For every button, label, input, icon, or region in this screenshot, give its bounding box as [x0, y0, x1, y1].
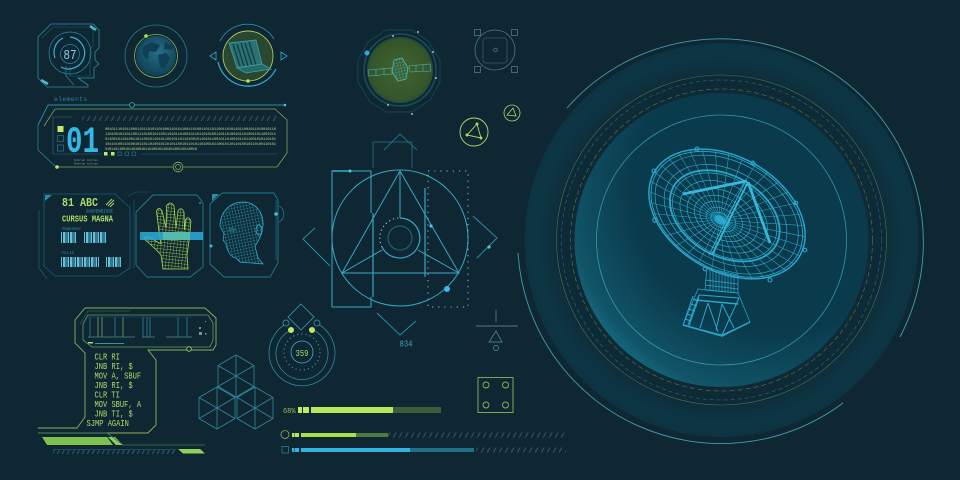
diagram value: 834 — [400, 338, 413, 350]
scan bar — [140, 232, 203, 240]
progress bar 68%: 68% — [283, 408, 296, 416]
binary text block: 00101110101100011011010110100011010110011010011011011001101011011001011010010110 — [105, 128, 277, 132]
sacred-geometry diagram — [303, 134, 497, 350]
assembly code: JNB RI, $ — [94, 381, 133, 391]
assembly code: SJMP AGAIN — [86, 419, 129, 429]
radar disk with satellite dish — [518, 39, 923, 444]
gauge value: 87 — [64, 48, 76, 64]
panel: code terminal — [38, 308, 216, 454]
panel: identity card: PRAESENT — [62, 228, 82, 232]
icon: triangle node large — [460, 118, 488, 146]
assembly code — [86, 352, 142, 429]
card heading: 81 ABC — [62, 196, 98, 210]
binary text block: 01100101101001101100101101011001011011010010110101100101101001011011001010110101 — [105, 138, 277, 142]
icon: four-dot square — [478, 378, 513, 412]
fine print — [74, 159, 98, 166]
progress bar 68% — [283, 407, 441, 416]
dish pedestal — [683, 268, 750, 336]
icon: wireframe satellite dish — [626, 123, 828, 336]
panel: binary readout 01 — [38, 102, 287, 172]
icon: wireframe head — [220, 202, 263, 264]
progress bar blue — [282, 446, 566, 453]
barcode: felis — [61, 257, 121, 267]
gauge 359 — [269, 304, 335, 386]
icon: satellite over planet — [358, 30, 440, 115]
assembly code: CLR RI — [94, 352, 120, 362]
binary text block: 10110100110100101101101001011010110010110101101001011001011011010010110100110101 — [105, 143, 277, 147]
panel: identity card: FELIS — [62, 252, 75, 256]
icon: triangle node small — [504, 105, 520, 121]
binary text block: 11010010110110011101001011001101011010010110110101001101101001011010011011001011 — [105, 133, 277, 137]
panel: hand scan — [136, 195, 203, 277]
terminal footer bars — [38, 433, 205, 454]
barcode: praesent — [61, 232, 106, 243]
panel: face scan — [210, 193, 284, 277]
dish rim bolts — [652, 147, 807, 282]
icon: balance symbol — [476, 310, 518, 350]
icon: wireframe hand — [144, 203, 191, 269]
binary text block: 0101101100101101001011010010110101100110110010 — [105, 148, 198, 152]
dish feed struts — [683, 181, 770, 255]
panel: identity card — [39, 192, 150, 279]
assembly code: MOV A, SBUF — [94, 372, 141, 382]
fine print: Rutrum rutrum — [74, 162, 98, 166]
assembly code: CLR TI — [94, 390, 120, 400]
icon: wireframe cubes — [199, 355, 273, 429]
assembly code: JNB TI, $ — [94, 410, 133, 420]
heading: elements: elements — [54, 96, 88, 103]
icon: globe — [125, 25, 187, 87]
binary text block — [105, 128, 277, 152]
fine print: Rutrum rutrum — [74, 159, 98, 162]
readout number: 01 — [66, 122, 99, 164]
assembly code: MOV SBUF, A — [94, 400, 142, 410]
progress bar green — [281, 430, 567, 438]
card name: CURSUS MAGNA — [62, 214, 113, 224]
gauge value: 359 — [296, 348, 309, 359]
icon: target square — [474, 30, 518, 72]
icon: laptop in circle — [210, 24, 287, 86]
gauge panel 87 — [38, 24, 99, 87]
assembly code: JNB RI, $ — [94, 362, 133, 372]
satellite body — [368, 58, 431, 81]
panel: identity card: SUSPENDISSE — [86, 208, 113, 214]
waveform chart — [88, 317, 206, 344]
dish rim, rings and spokes — [626, 123, 828, 305]
